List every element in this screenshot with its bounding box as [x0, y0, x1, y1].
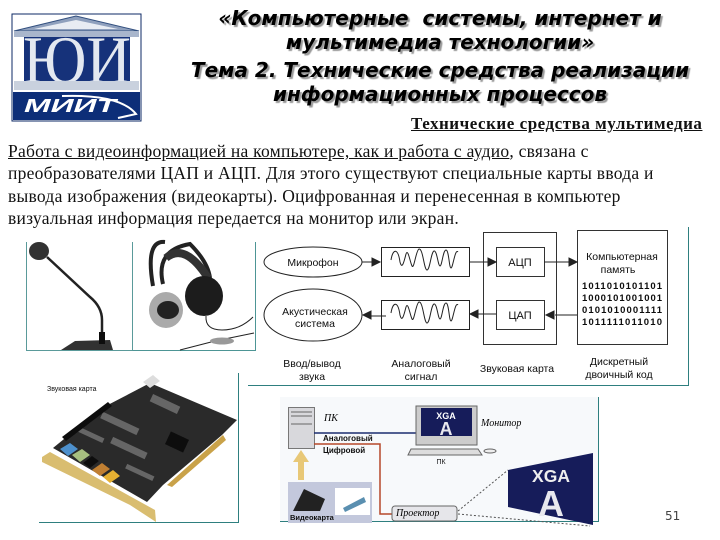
column captions: Ввод/вывод: [283, 358, 341, 370]
speaker node: система: [295, 318, 335, 330]
projected XGA screen: XGA: [532, 466, 570, 486]
circuit board: [53, 383, 237, 502]
monitor label: Монитор: [480, 418, 521, 429]
sound card caption: Звуковая карта: [47, 386, 97, 393]
monitor: A: [440, 419, 452, 439]
arrow: yellow up: [293, 450, 309, 480]
column captions: сигнал: [405, 371, 437, 383]
column captions: двоичный код: [585, 369, 653, 381]
PC label: ПК: [323, 413, 339, 424]
column captions: звука: [299, 371, 325, 383]
sound card box: [484, 232, 556, 344]
video card block: Видеокарта: [290, 513, 335, 522]
analog signal box: output: [382, 300, 470, 330]
computer memory box: память: [601, 264, 636, 276]
logo: university emblem: МИИТ: [24, 96, 120, 116]
text block: body paragraph: Работа с видеоинформацией на компьютере, как и работа с аудио, связана с преобразователями ЦАП и АЦП. Для этого существуют специальные карты ввода и вывода изображения (видеокарты). Оцифрованная и перенесенная в компьютер визуальная информация передается на монитор или экран.: [8, 141, 654, 228]
heading: multimedia hardware: Технические средства мультимедиа: [411, 114, 702, 133]
microphone node: [264, 247, 362, 277]
computer memory box: 1011111011010: [582, 317, 662, 328]
panel: video output diagram: Аналоговый: [323, 434, 373, 443]
computer memory box: 0101010001111: [582, 305, 663, 316]
title: topic: Тема 2. Технические средства реализации информационных процессов: [191, 58, 689, 106]
column captions: Аналоговый: [391, 358, 451, 370]
column captions: Звуковая карта: [480, 363, 554, 375]
PC tower: [288, 408, 314, 448]
computer memory box: Компьютерная: [586, 251, 658, 263]
speaker node: Акустическая: [282, 306, 348, 318]
video card block: [288, 482, 372, 523]
analog and digital cables: [314, 433, 416, 514]
computer memory box: 1000101001001: [582, 293, 663, 304]
panel: headphones photo: [132, 242, 256, 350]
page number: 51: [665, 509, 680, 523]
title: course name: «Компьютерные системы, интернет и мультимедиа технологии»: [218, 6, 662, 54]
DAC box: ЦАП: [508, 310, 532, 322]
computer memory box: 1011010101101: [582, 281, 663, 292]
DAC box: [496, 300, 544, 330]
panel: video output diagram: ПК: [436, 459, 446, 466]
analog signal box: input: [382, 248, 470, 276]
ADC box: [496, 248, 544, 276]
computer memory box: [578, 230, 668, 344]
microphone node: Микрофон: [287, 257, 339, 269]
speaker node: [264, 289, 362, 341]
monitor: XGA: [436, 411, 456, 421]
arrows: [362, 258, 577, 319]
projection beams: [458, 470, 590, 526]
panel: sound digitizing diagram: [248, 227, 688, 386]
projected XGA screen: [508, 453, 593, 525]
logo: university emblem: [12, 14, 141, 121]
projected XGA screen: A: [538, 483, 564, 524]
projector: [392, 506, 457, 521]
logo: university emblem: ЮИ: [23, 22, 131, 98]
monitor: [408, 406, 496, 455]
ADC box: АЦП: [508, 257, 532, 269]
column captions: [283, 356, 653, 383]
panel: microphone photo: [26, 242, 132, 350]
panel: sound card photo: [39, 373, 238, 522]
panel: video output diagram: Цифровой: [323, 446, 365, 455]
projector: Проектор: [395, 508, 439, 519]
column captions: Дискретный: [590, 356, 648, 368]
panel: video output diagram: [280, 397, 598, 526]
